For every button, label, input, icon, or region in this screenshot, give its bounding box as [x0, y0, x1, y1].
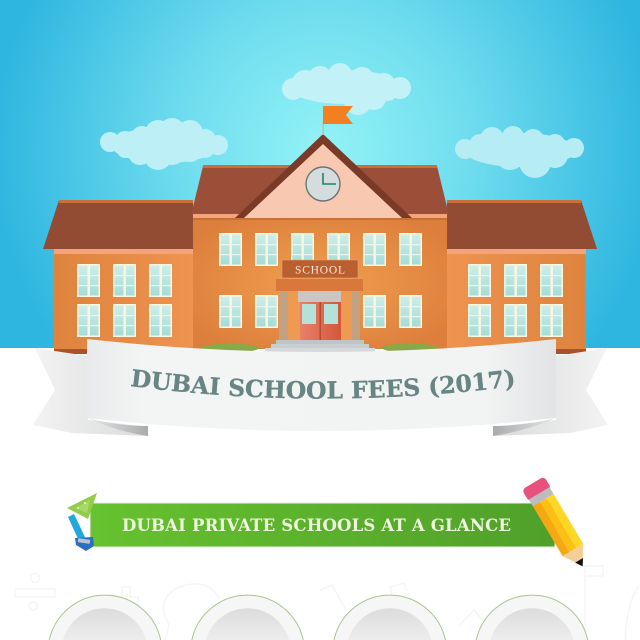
clock: [306, 167, 340, 201]
school sign: SCHOOL: [295, 264, 345, 276]
icon: marker and sharpener: [68, 514, 94, 551]
info circle 4: [476, 595, 588, 640]
ribbon fold left: [88, 418, 148, 436]
icon: set square: [67, 493, 97, 519]
banner text: DUBAI PRIVATE SCHOOLS AT A GLANCE: [122, 516, 511, 535]
title ribbon: [34, 339, 608, 436]
info circle 1: [49, 595, 161, 640]
title text: DUBAI SCHOOL FEES (2017): [130, 369, 514, 399]
info circle 2: [192, 595, 303, 640]
pencil ferrule: [529, 487, 554, 506]
info circle 3: [334, 595, 445, 640]
faint background doodles: [15, 566, 640, 640]
background sky: [0, 0, 640, 348]
pencil tip: [563, 544, 593, 572]
left wing: [43, 200, 193, 354]
school sign: [282, 260, 358, 278]
lower windows: [219, 295, 422, 328]
pencil body: [533, 494, 583, 556]
school building: [43, 106, 597, 354]
steps: [265, 340, 375, 353]
cloud: right: [455, 126, 584, 178]
icon: pencil: [522, 476, 594, 573]
gable roof: [235, 134, 412, 218]
entrance: [276, 279, 363, 341]
ribbon body: [87, 339, 556, 431]
central block: [191, 165, 449, 349]
cloud: top centre: [282, 63, 411, 115]
ribbon tail right: [493, 348, 608, 436]
ribbon tail left: [33, 348, 148, 436]
bushes: [201, 344, 438, 352]
right wing: [447, 200, 597, 354]
pencil lead: [575, 558, 587, 569]
pencil eraser: [522, 476, 551, 502]
cloud: left: [100, 118, 228, 170]
ribbon fold right: [493, 418, 556, 436]
flag: [322, 106, 353, 135]
banner bar: [90, 503, 555, 547]
section banner: [90, 503, 555, 547]
upper windows: [219, 233, 422, 266]
